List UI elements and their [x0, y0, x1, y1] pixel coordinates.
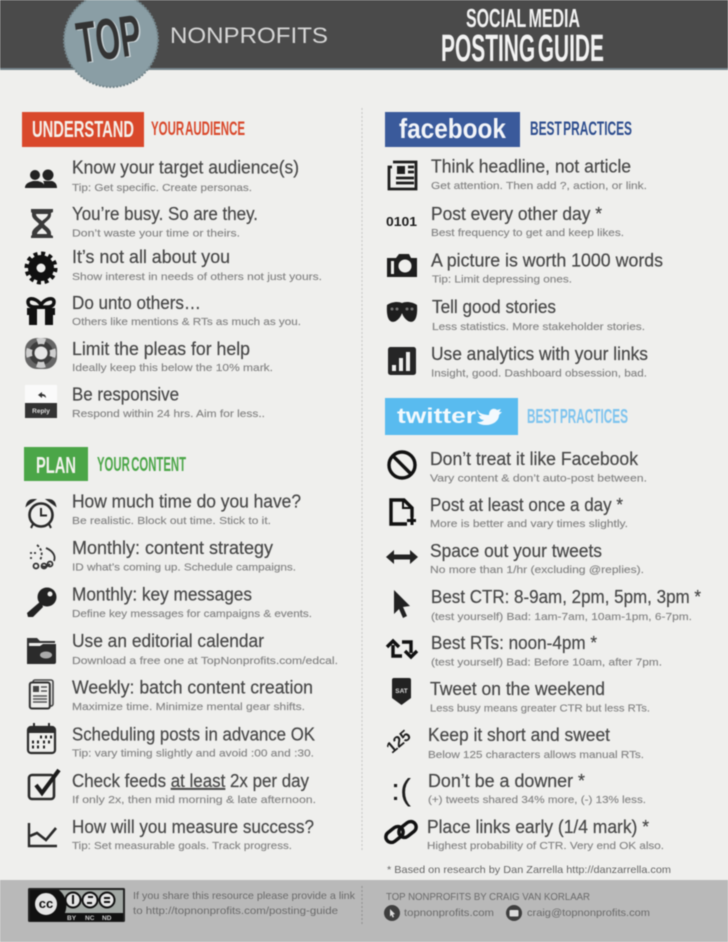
icon: cursor [394, 590, 410, 618]
header bar [0, 0, 728, 70]
item: monthly content strategy: ID what’s coming up. Schedule campaigns. [72, 562, 296, 574]
item: don't treat: Vary content & don’t auto-post between. [430, 473, 647, 485]
icon: people [25, 170, 57, 188]
credits: craig@topnonprofits.com [527, 907, 650, 919]
column divider [361, 108, 363, 850]
icon: camera [387, 254, 417, 277]
icon: retweet [387, 641, 417, 657]
creative commons badge: BY [67, 915, 77, 922]
icon: reply [25, 385, 57, 418]
item: limit the pleas [25, 338, 273, 374]
item: be responsive: Respond within 24 hrs. Aim for less.. [72, 408, 265, 420]
item: how much time: Be realistic. Block out time. Stick to it. [72, 515, 271, 527]
heading: facebook: facebook [399, 113, 506, 144]
item: monthly key messages: Define key messages for campaigns & events. [72, 608, 312, 620]
item: editorial calendar: Download a free one at TopNonprofits.com/edcal. [72, 655, 338, 667]
icon: gift [27, 299, 55, 325]
icon: SAT tag [392, 678, 411, 705]
item: post every other day: Best frequency to get and keep likes. [431, 227, 624, 239]
item: check feeds [29, 770, 316, 806]
icon: new document [391, 500, 416, 525]
credits: TOP NONPROFITS BY CRAIG VAN KORLAAR [386, 891, 590, 903]
heading: facebook [385, 112, 632, 147]
heading: twitter: twitter [397, 405, 476, 428]
item: you're busy: Don’t waste your time or theirs. [72, 228, 240, 240]
item: do unto others: Others like mentions & RTs as much as you. [72, 316, 301, 328]
icon: 0101: 0101 [386, 215, 417, 229]
icon: hourglass [31, 209, 53, 238]
item: you're busy: You’re busy. So are they. [72, 203, 258, 224]
icon: calendar [28, 723, 55, 753]
item: place links early: Highest probability of CTR. Very end OK also. [427, 840, 664, 852]
item: place links early: Place links early (1/4 mark) * [427, 816, 649, 837]
item: editorial calendar: Use an editorial calendar [72, 630, 264, 651]
icon: alarm clock [27, 500, 55, 528]
item: tweet on the weekend: Less busy means greater CTR but less RTs. [430, 703, 650, 715]
item: think headline: Think headline, not article [431, 156, 631, 177]
heading: understand [22, 112, 245, 147]
icon: theatre masks [387, 302, 417, 322]
icon: reply: Reply [32, 408, 50, 415]
item: monthly key messages [27, 584, 312, 620]
footnote: * Based on research by Dan Zarrella http://danzarrella.com [387, 864, 671, 876]
item: keep it short: Below 125 characters allows manual RTs. [428, 749, 644, 761]
item: check feeds: If only 2x, then mid morning & late afternoon. [72, 794, 316, 806]
heading: twitter [385, 398, 628, 435]
panel: twitter best practices [384, 398, 701, 876]
item: weekly batch: Maximize time. Minimize mental gear shifts. [72, 701, 305, 713]
item: tweet on the weekend: Tweet on the weekend [430, 678, 605, 699]
credits: topnonprofits.com [404, 907, 494, 919]
icon: double arrow [386, 550, 418, 564]
item: limit the pleas: Ideally keep this below the 10% mark. [72, 362, 273, 374]
item: know your target audience: Tip: Get specific. Create personas. [72, 182, 252, 194]
item: check feeds: Check feeds at least 2x per day [72, 770, 310, 791]
title [441, 3, 604, 70]
item: editorial calendar [27, 630, 338, 667]
item: best RTs: (test yourself) Bad: Before 10am, after 7pm. [431, 657, 662, 669]
item: best CTR: (test yourself) Bad: 1am-7am, 10am-1pm, 6-7pm. [431, 611, 692, 623]
item: how much time [27, 490, 301, 528]
item: scheduling posts [28, 723, 316, 760]
heading: understand: UNDERSTAND [32, 116, 134, 142]
icon: line chart [29, 823, 57, 846]
item: scheduling posts: Scheduling posts in advance OK [72, 724, 316, 744]
heading: plan [24, 447, 186, 481]
icon: key [27, 588, 56, 617]
item: best CTR [394, 586, 701, 623]
item: post every other day: Post every other day * [431, 203, 602, 224]
icon: SAT tag: SAT [395, 688, 408, 695]
item: measure success: How will you measure success? [72, 816, 314, 837]
icon: checkbox [29, 770, 59, 799]
item: best CTR: Best CTR: 8-9am, 2pm, 5pm, 3pm * [431, 586, 701, 607]
credits [384, 891, 650, 921]
item: best RTs: Best RTs: noon-4pm * [431, 632, 597, 653]
icon: 125: 125 [384, 727, 415, 757]
item: think headline [389, 156, 647, 192]
panel: understand your audience [22, 112, 322, 420]
item: best RTs [387, 632, 662, 669]
icon: sad face: :( [391, 772, 412, 807]
item: know your target audience [25, 156, 299, 194]
item: tell good stories: Less statistics. More stakeholder stories. [432, 321, 645, 333]
item: tweet on the weekend [392, 678, 650, 715]
item: do unto others [27, 292, 301, 328]
item: space out: No more than 1/hr (excluding @replies). [430, 564, 644, 576]
title: SOCIAL MEDIA [466, 3, 580, 33]
item: limit the pleas: Limit the pleas for help [72, 338, 250, 359]
icon: lifebuoy [25, 338, 57, 369]
item: not all about you: It’s not all about you [72, 246, 230, 267]
icon: chain link [384, 819, 418, 845]
item: monthly content strategy: Monthly: content strategy [72, 537, 274, 558]
panel: facebook best practices [385, 112, 663, 380]
item: use analytics [388, 343, 648, 380]
item: a picture [387, 250, 663, 286]
item: scheduling posts: Tip: vary timing slightly and avoid :00 and :30. [72, 748, 314, 760]
item: use analytics: Use analytics with your links [431, 343, 648, 364]
logo badge: TOP [64, 0, 158, 87]
item: monthly key messages: Monthly: key messages [72, 584, 252, 604]
item: tell good stories: Tell good stories [432, 296, 556, 317]
share notice: to http://topnonprofits.com/posting-guide [133, 905, 338, 917]
heading: facebook: BEST PRACTICES [530, 119, 632, 140]
item: do unto others: Do unto others… [72, 292, 201, 313]
item: don't be a downer [391, 770, 646, 807]
item: use analytics: Insight, good. Dashboard obsession, bad. [431, 368, 647, 380]
icon: email [506, 905, 522, 921]
item: space out [386, 540, 644, 576]
icon: prohibited sign [389, 452, 415, 478]
item: keep it short [384, 724, 644, 761]
icon: gear [26, 254, 56, 282]
share notice: If you share this resource please provide a link [133, 890, 356, 902]
footer band [0, 880, 728, 942]
icon: twitter bird [477, 409, 502, 425]
item: weekly batch: Weekly: batch content creation [72, 676, 313, 697]
item: don't treat [389, 448, 647, 485]
creative commons badge [28, 888, 125, 922]
icon: newspaper [389, 162, 416, 189]
item: think headline: Get attention. Then add ?, action, or link. [431, 180, 647, 192]
item: post at least once [391, 494, 628, 530]
item: don't treat: Don’t treat it like Facebook [430, 448, 639, 469]
logo wordmark: NONPROFITS: NONPROFITS [170, 23, 328, 48]
icon: website [384, 905, 400, 921]
heading: plan: YOUR CONTENT [97, 454, 186, 476]
creative commons badge: NC [85, 915, 95, 922]
item: a picture: A picture is worth 1000 words [431, 250, 663, 271]
item: not all about you: Show interest in needs of others not just yours. [72, 271, 322, 283]
item: post at least once: More is better and vary times slightly. [430, 518, 628, 530]
heading: understand: YOUR AUDIENCE [151, 119, 245, 140]
item: how much time: How much time do you have? [72, 490, 301, 512]
item: keep it short: Keep it short and sweet [428, 724, 610, 745]
item: you're busy [31, 203, 258, 240]
item: tell good stories [387, 296, 645, 333]
heading: plan: PLAN [36, 452, 76, 478]
item: be responsive: Be responsive [72, 384, 179, 404]
creative commons badge: ND [102, 915, 112, 922]
heading: twitter: BEST PRACTICES [527, 406, 628, 428]
item: place links early [384, 816, 664, 852]
item: measure success [29, 816, 314, 852]
item: space out: Space out your tweets [430, 540, 602, 561]
item: be responsive [25, 384, 265, 420]
item: don't be a downer: Don’t be a downer * [428, 770, 585, 791]
item: don't be a downer: (+) tweets shared 34% more, (-) 13% less. [428, 794, 646, 806]
item: measure success: Tip: Set measurable goals. Track progress. [72, 840, 292, 852]
item: not all about you [26, 246, 322, 283]
item: weekly batch [30, 676, 313, 713]
icon: strategy diagram [30, 545, 55, 568]
footer divider [361, 886, 363, 926]
icon: folder [27, 638, 56, 664]
item: post at least once: Post at least once a day * [430, 494, 623, 515]
item: monthly content strategy [30, 537, 296, 574]
item: post every other day [386, 203, 624, 239]
item: know your target audience: Know your target audience(s) [72, 156, 299, 178]
panel: plan your content [24, 447, 338, 852]
icon: bar chart [388, 347, 416, 375]
item: a picture: Tip: Limit depressing ones. [432, 274, 572, 286]
creative commons badge: cc [39, 896, 53, 911]
share notice [133, 890, 356, 917]
icon: papers [30, 680, 53, 708]
